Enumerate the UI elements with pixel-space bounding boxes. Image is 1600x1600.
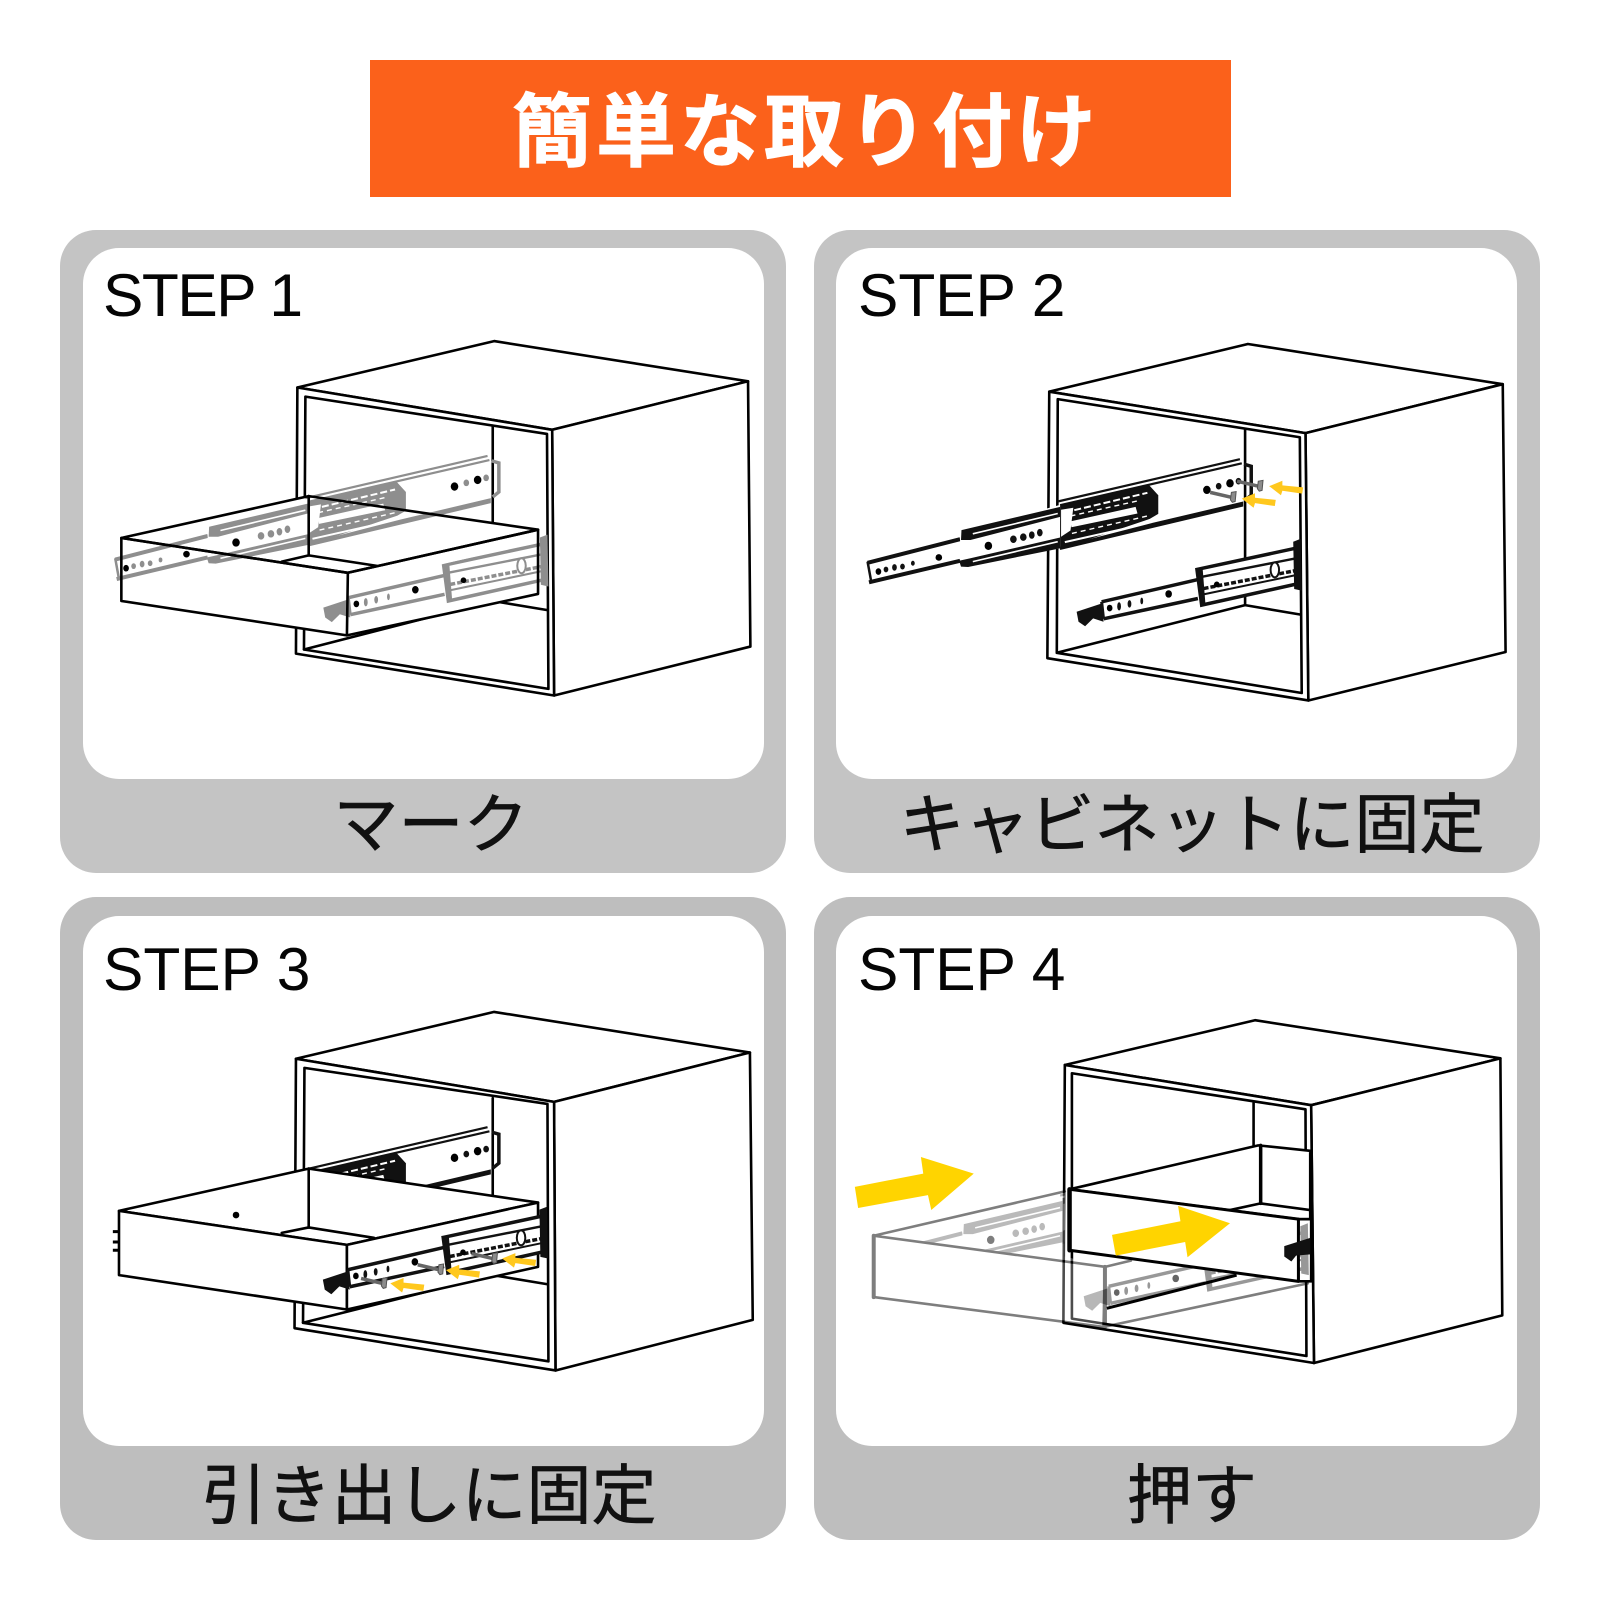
illustration: drawer marked against cabinet [114,341,750,695]
step 4 label: STEP 4 [858,935,1065,1003]
step 1 label: STEP 1 [103,261,303,329]
panel: step 1 [60,230,786,873]
step 2 label: STEP 2 [858,261,1065,329]
step 3 label: STEP 3 [103,935,310,1003]
step 3 caption: 引き出しに固定 [201,1459,657,1532]
panel: step 2 [814,230,1540,873]
panel: step 3 [60,897,786,1540]
step 2 caption: キャビネットに固定 [899,788,1485,861]
step 1 caption: マーク [333,788,529,861]
title text: 簡単な取り付け [512,88,1100,177]
illustration: rails fixed to cabinet [867,344,1506,700]
title banner [370,60,1231,197]
panel: step 4 [814,897,1540,1540]
illustration: rail fixed to drawer [113,1012,753,1370]
step 4 caption: 押す [1127,1459,1257,1532]
yellow arrow on drawer [1112,1206,1230,1257]
yellow arrow left [855,1157,974,1210]
illustration: push drawer into cabinet [855,1020,1502,1363]
